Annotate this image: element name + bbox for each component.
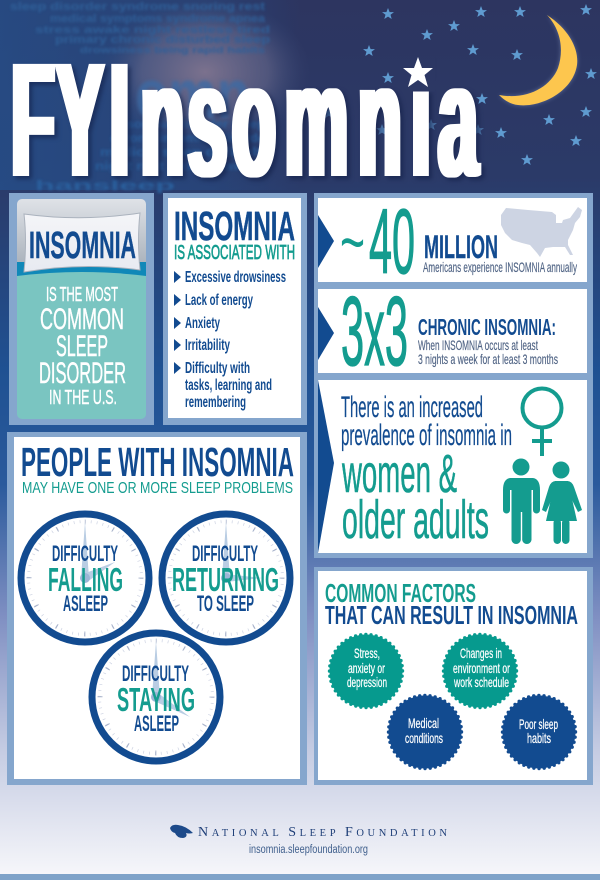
panel: women and older adults <box>314 376 593 558</box>
badge: changes: work schedule <box>453 674 509 690</box>
symptom list <box>174 269 286 411</box>
badge: poor sleep: habits <box>527 730 551 746</box>
million: MILLION <box>424 229 498 265</box>
arrow <box>318 307 334 360</box>
symptom list: Excessive drowsiness <box>185 269 286 286</box>
panel: 3x3: 3x3 <box>341 276 408 386</box>
icon: woman <box>542 462 582 544</box>
badge: changes <box>444 634 516 708</box>
heading: COMMON FACTORS <box>325 578 476 608</box>
pillow label: INSOMNIA <box>29 225 136 267</box>
header photo: blurred dictionary page: sleep disorder syndrome snoring rest <box>10 1 265 13</box>
map of USA <box>501 207 582 257</box>
symptom list: Lack of energy <box>185 292 253 309</box>
badge: stress: Stress, <box>354 645 380 661</box>
arrow <box>318 215 334 268</box>
badge: medical: conditions <box>405 730 443 746</box>
subheading: IS ASSOCIATED WITH <box>174 242 295 264</box>
night stars <box>323 4 597 165</box>
tilde: ~ <box>340 203 365 281</box>
panel: 40 million <box>314 191 593 293</box>
badge: stress: depression <box>347 674 387 690</box>
moon <box>499 15 577 105</box>
badge: poor sleep: Poor sleep <box>519 716 558 732</box>
disorder text: IN THE U.S. <box>49 387 117 409</box>
footer logo <box>170 825 447 840</box>
header photo: blurred dictionary page: chronic insomnia disorder <box>110 131 270 145</box>
prevalence text <box>341 391 512 452</box>
pillow <box>24 213 140 272</box>
disorder text: COMMON <box>40 303 124 336</box>
blanket <box>17 272 146 419</box>
header photo: blurred dictionary page: insomnia disorder sleep <box>115 117 265 131</box>
badge: stress: anxiety or <box>348 660 385 676</box>
disorder text: SLEEP <box>56 330 108 363</box>
panel: people with insomnia <box>7 432 307 785</box>
icon: man <box>503 458 540 544</box>
header photo: blurred dictionary page: medical sleep difficulty <box>100 145 270 159</box>
arrow <box>318 380 334 553</box>
header photo: blurred dictionary page: night rest anxiety awake <box>95 159 270 173</box>
panel: 40 million: 40 <box>369 191 415 293</box>
heading: INSOMNIA <box>174 203 295 249</box>
header photo: blurred dictionary page <box>0 0 310 193</box>
panel: common factors <box>314 567 593 785</box>
clock: falling asleep: DIFFICULTY <box>52 541 118 566</box>
clock: falling asleep <box>21 514 149 642</box>
clock: staying asleep <box>92 633 220 761</box>
clock: staying asleep: STAYING <box>117 681 195 718</box>
disorder text: IS THE MOST <box>46 284 118 306</box>
badge: stress <box>330 634 402 708</box>
clock: staying asleep: DIFFICULTY <box>122 661 189 686</box>
clock: returning to sleep <box>162 514 290 642</box>
heading: PEOPLE WITH INSOMNIA <box>21 439 294 485</box>
clock: returning to sleep: DIFFICULTY <box>192 541 258 566</box>
symptom list: Anxiety <box>185 315 220 332</box>
header photo: blurred dictionary page: primary chronic disturbed sleep <box>55 34 270 46</box>
badge: medical <box>388 696 462 768</box>
disorder text <box>39 284 126 409</box>
badge: changes: Changes in <box>460 645 502 661</box>
clock: falling asleep: FALLING <box>48 561 123 598</box>
icon: female symbol <box>522 388 562 456</box>
disorder text: DISORDER <box>39 357 126 390</box>
subheading: MAY HAVE ONE OR MORE SLEEP PROBLEMS <box>22 480 293 497</box>
badge: changes: environment or <box>453 660 510 676</box>
symptom list: tasks, learning and <box>185 377 272 394</box>
header photo: blurred dictionary page: hansleep <box>35 177 175 193</box>
header photo: blurred dictionary page: stress awake night restless tired <box>35 25 270 36</box>
clock: returning to sleep: TO SLEEP <box>197 591 254 616</box>
definition <box>418 337 558 367</box>
panel: 3x3 <box>314 276 593 386</box>
organisation name: N ATIONAL S LEEP F OUNDATION <box>198 825 447 840</box>
panel: associated with <box>163 193 307 425</box>
clock: falling asleep: ASLEEP <box>63 591 108 616</box>
icon: foundation mark <box>170 825 193 838</box>
symptom list: Irritability <box>185 337 230 354</box>
header photo: blurred dictionary page: medical symptoms syndrome apnea <box>50 13 266 25</box>
icon: white star above i <box>403 57 433 87</box>
bottom band <box>0 874 600 880</box>
clock: returning to sleep: RETURNING <box>172 561 279 598</box>
clock: staying asleep: ASLEEP <box>134 711 179 736</box>
header photo: blurred dictionary page: drowsiness being rapid habits <box>80 45 265 55</box>
symptom list: Difficulty with <box>185 360 250 377</box>
title: FYInsomnia <box>11 28 478 211</box>
badge: medical: Medical <box>408 715 439 731</box>
footer url: insomnia.sleepfoundation.org <box>249 844 368 856</box>
emphasis text: women & <box>341 444 457 504</box>
panel: most common sleep disorder <box>9 193 154 425</box>
badge: poor sleep <box>502 696 576 768</box>
symptom list: remembering <box>185 394 246 411</box>
emphasis text <box>341 444 489 550</box>
header photo: blurred dictionary page: omn <box>135 55 250 133</box>
